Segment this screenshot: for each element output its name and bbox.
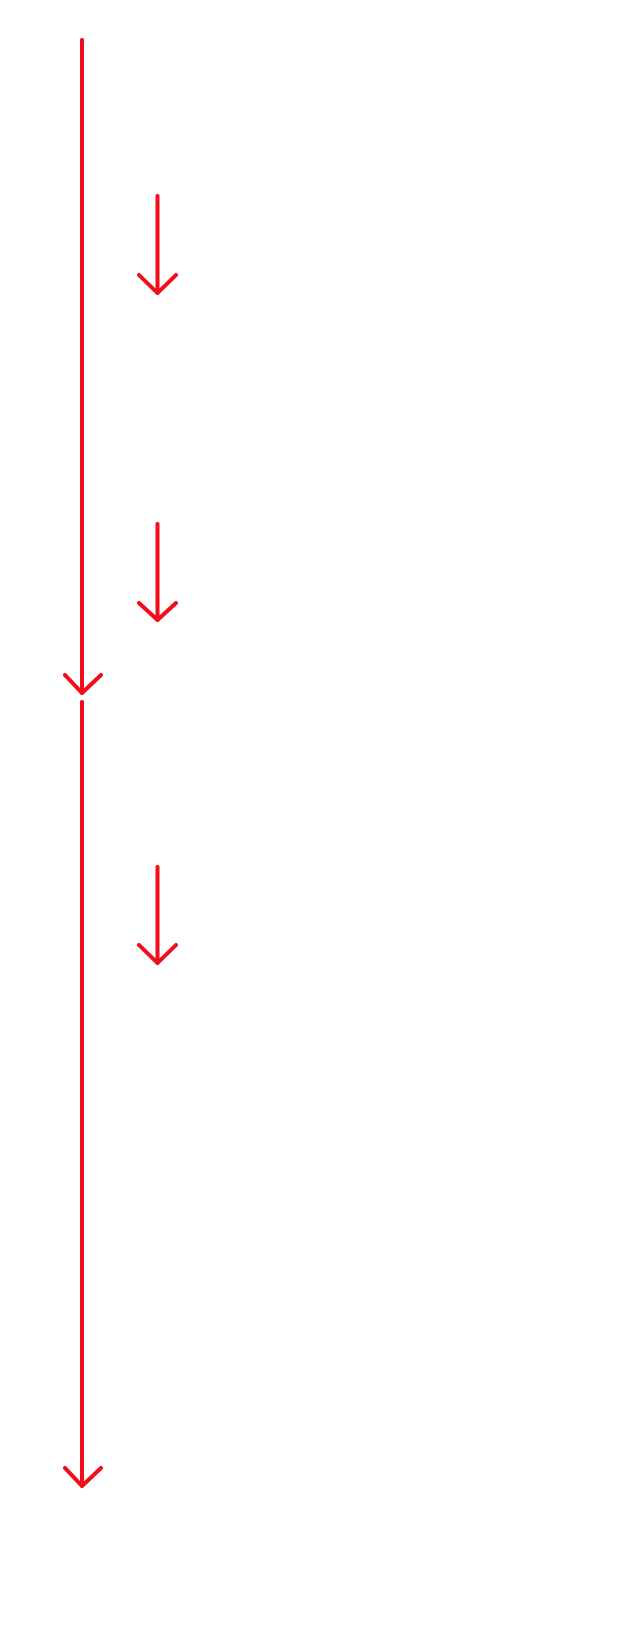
arrow: short 3 [139, 867, 176, 963]
arrow: short 1 [139, 196, 176, 293]
arrow: long bottom [65, 702, 101, 1486]
arrow: long top [65, 40, 101, 693]
arrow: short 2 [139, 524, 176, 620]
